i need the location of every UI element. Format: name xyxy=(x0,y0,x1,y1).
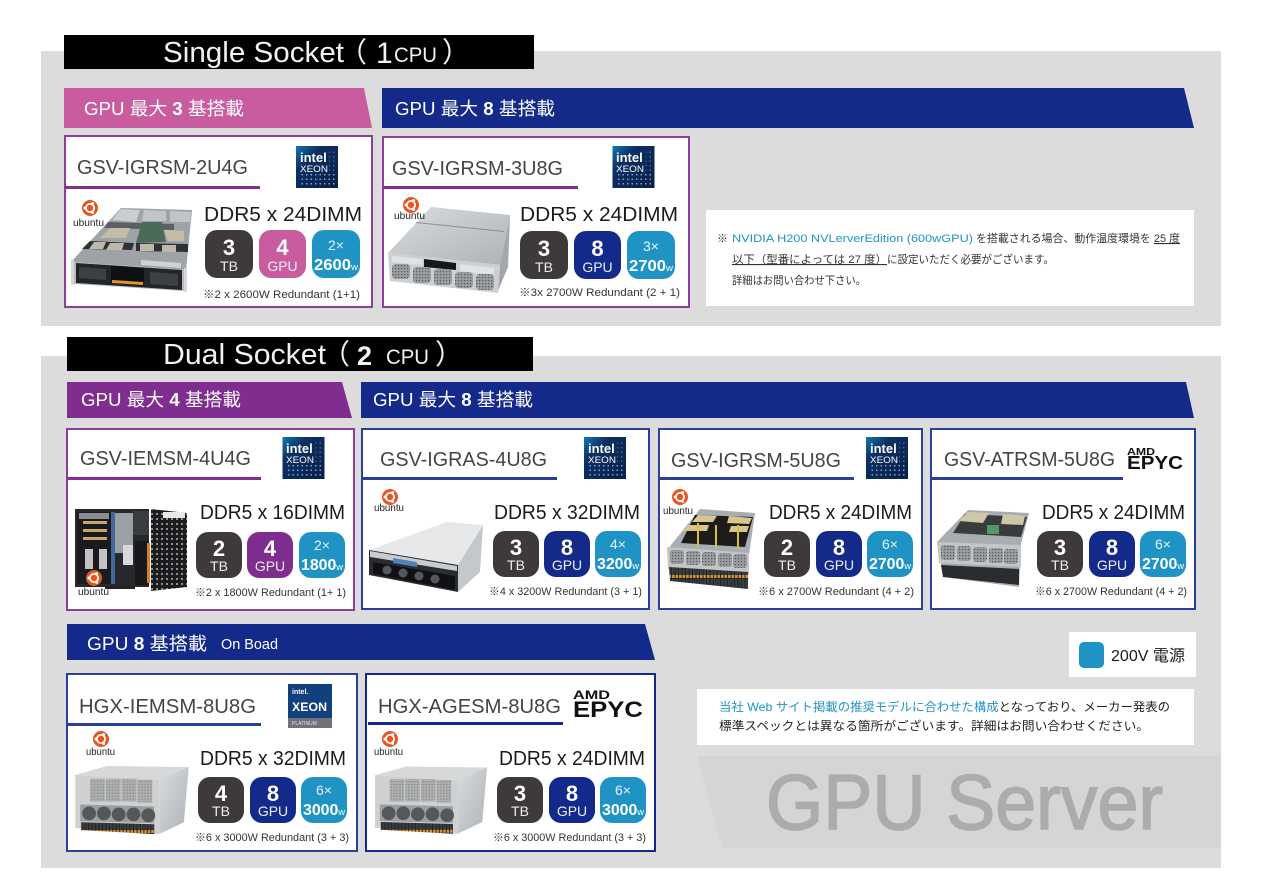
badge: gpu: GPU xyxy=(582,259,613,275)
memory spec: DDR5 x 24DIMM xyxy=(204,204,362,226)
memory spec: DDR5 x 32DIMM xyxy=(200,748,346,770)
badge: memory: 2 xyxy=(213,536,225,561)
badge: memory xyxy=(497,777,543,823)
logo: ubuntu xyxy=(86,731,115,758)
heading: single socket: CPU xyxy=(394,44,437,67)
badge: memory xyxy=(205,230,253,278)
badge: gpu: 8 xyxy=(561,535,573,560)
server photo xyxy=(75,509,187,591)
model name: HGX-AGESM-8U8G xyxy=(378,696,561,718)
logo: intel xeon: XEON xyxy=(588,455,616,466)
banner: gpu max 8 xyxy=(382,88,1194,128)
badge: power: 3× xyxy=(643,238,659,254)
callout: temperature note: に設定いただく必要がございます。 xyxy=(887,252,1054,266)
badge: memory xyxy=(493,531,539,577)
server photo xyxy=(388,207,510,293)
logo: intel xeon: intel xyxy=(286,441,313,456)
legend: 200V power: 200V 電源 xyxy=(1111,647,1185,665)
logo: amd epyc: EPYC xyxy=(1127,453,1183,473)
badge: power: 2600 w xyxy=(314,257,359,274)
callout: temperature note: NVIDIA H200 NVLerverEdition (600wGPU) xyxy=(732,233,973,245)
card: HGX-AGESM-8U8G xyxy=(366,674,655,851)
logo: intel xeon: intel xyxy=(300,150,327,165)
badge: gpu xyxy=(544,531,590,577)
badge: gpu xyxy=(574,231,621,279)
badge: power xyxy=(312,230,360,278)
badge: memory: TB xyxy=(1051,557,1069,573)
badge: power: 1800w xyxy=(301,557,344,574)
badge: power: 4× xyxy=(610,536,626,552)
banner: gpu max 8: GPU 最大 8 基搭載 xyxy=(395,99,555,119)
banner: gpu 8 on board xyxy=(67,624,655,660)
heading: dual socket: 2 xyxy=(357,341,372,371)
logo: intel xeon: XEON xyxy=(870,455,898,466)
logo: amd epyc xyxy=(573,688,643,722)
memory spec: DDR5 x 24DIMM xyxy=(1042,502,1185,524)
badge: gpu: GPU xyxy=(255,558,285,574)
logo: intel xeon platinum: intel. xyxy=(292,689,308,696)
callout: temperature note: ※ xyxy=(717,233,728,245)
model name: GSV-IGRSM-5U8G xyxy=(671,450,841,472)
badge: gpu xyxy=(247,532,293,578)
callout: temperature note xyxy=(706,210,1194,306)
badge: gpu: 8 xyxy=(591,236,604,261)
badge: gpu xyxy=(549,777,595,823)
callout: temperature note: を搭載される場合、動作温度環境を 25 度 xyxy=(976,231,1180,245)
badge: memory: TB xyxy=(212,803,230,819)
logo: intel xeon xyxy=(282,437,324,479)
heading: single socket: Single Socket xyxy=(163,37,344,69)
badge: power xyxy=(867,531,913,577)
badge: memory: TB xyxy=(535,259,553,275)
redundancy note: ※2 x 1800W Redundant (1+ 1) xyxy=(195,587,346,599)
badge: memory: 4 xyxy=(215,781,228,806)
heading: dual socket: CPU xyxy=(386,346,429,369)
logo: intel xeon: intel xyxy=(870,441,897,456)
badge: gpu: GPU xyxy=(267,258,298,274)
badge: power: 2× xyxy=(328,237,344,253)
model name: GSV-IGRAS-4U8G xyxy=(380,449,547,471)
logo: ubuntu xyxy=(394,197,425,222)
server photo xyxy=(937,510,1029,587)
badge: memory: 3 xyxy=(510,535,522,560)
memory spec: DDR5 x 16DIMM xyxy=(200,502,345,524)
badge: memory: 3 xyxy=(514,781,526,806)
badge: gpu: GPU xyxy=(552,557,582,573)
card: HGX-IEMSM-8U8G xyxy=(67,674,357,851)
badge: power: 2700w xyxy=(1142,556,1185,573)
callout: recommended configuration note: 当社 Web サイト掲載の推奨モデルに合わせた構成 となっており、メーカー発表の xyxy=(719,699,1170,714)
banner: gpu max 3: GPU 最大 3 基搭載 xyxy=(84,99,244,119)
badge: memory xyxy=(1037,531,1083,577)
heading: single socket: 1 xyxy=(376,37,393,70)
badge: gpu: GPU xyxy=(258,803,288,819)
badge: power: 2700 w xyxy=(629,258,674,275)
badge: power: 2700w xyxy=(869,556,912,573)
badge: power xyxy=(600,777,646,823)
panel: single socket xyxy=(41,51,1221,326)
badge: gpu: 8 xyxy=(267,781,279,806)
badge: power: 3000w xyxy=(602,802,645,819)
badge: memory: TB xyxy=(778,557,796,573)
badge: gpu xyxy=(259,230,306,278)
badge: power: 3000w xyxy=(303,802,346,819)
badge: gpu xyxy=(250,777,296,823)
badge: memory: 3 xyxy=(538,236,550,261)
memory spec: DDR5 x 24DIMM xyxy=(520,204,678,226)
model name: GSV-ATRSM-5U8G xyxy=(944,449,1115,471)
badge: gpu: 4 xyxy=(276,235,289,260)
logo: intel xeon: XEON xyxy=(286,455,314,466)
banner: gpu max 3 xyxy=(64,88,372,128)
badge: gpu: GPU xyxy=(1097,557,1127,573)
card: GSV-ATRSM-5U8G xyxy=(931,429,1195,609)
legend: 200V power xyxy=(1069,632,1196,677)
card: GSV-IGRAS-4U8G xyxy=(362,429,649,609)
logo: ubuntu: ubuntu xyxy=(78,586,109,598)
badge: memory: TB xyxy=(220,258,238,274)
heading: dual socket: Dual Socket xyxy=(163,339,326,371)
logo: intel xeon xyxy=(296,146,338,188)
badge: power: 3200w xyxy=(597,556,640,573)
badge: power xyxy=(595,531,641,577)
server photo xyxy=(375,766,487,834)
logo: ubuntu xyxy=(663,489,693,517)
badge: memory xyxy=(764,531,810,577)
memory spec: DDR5 x 24DIMM xyxy=(499,748,645,770)
badge: memory xyxy=(196,532,242,578)
model name: GSV-IGRSM-2U4G xyxy=(77,157,248,179)
callout: recommended configuration note: 標準スペックとは異なる箇所がございます。詳細はお問い合わせください。 xyxy=(719,718,1149,733)
model name: HGX-IEMSM-8U8G xyxy=(79,696,256,718)
card: GSV-IGRSM-2U4G xyxy=(65,136,372,307)
badge: power xyxy=(627,231,675,279)
badge: gpu: 8 xyxy=(833,535,845,560)
badge: gpu: 4 xyxy=(264,536,277,561)
redundancy note: ※4 x 3200W Redundant (3 + 1) xyxy=(489,586,642,598)
logo: intel xeon: intel xyxy=(588,441,615,456)
logo: intel xeon platinum: PLATINUM xyxy=(292,721,317,727)
model name: GSV-IGRSM-3U8G xyxy=(392,158,563,180)
callout: temperature note: 以下（型番によっては 27 度） xyxy=(732,252,887,266)
panel: dual socket xyxy=(41,356,1221,868)
banner: gpu max 8 dual: GPU 最大 8 基搭載 xyxy=(373,390,533,410)
logo: ubuntu: ubuntu xyxy=(663,505,693,517)
logo: intel xeon platinum: XEON xyxy=(292,700,327,714)
logo: ubuntu: ubuntu xyxy=(394,210,425,222)
logo: intel xeon: intel xyxy=(616,150,643,165)
logo: amd epyc: AMD xyxy=(573,688,610,702)
badge: gpu xyxy=(816,531,862,577)
badge: gpu: GPU xyxy=(824,557,854,573)
card: GSV-IGRSM-3U8G xyxy=(383,137,689,307)
memory spec: DDR5 x 32DIMM xyxy=(494,502,640,524)
logo: ubuntu: ubuntu xyxy=(374,746,403,758)
badge: memory: 2 xyxy=(781,535,793,560)
banner: gpu 8 on board: GPU 8 基搭載 xyxy=(87,634,207,654)
badge: memory: 3 xyxy=(1054,535,1066,560)
logo: amd epyc: EPYC xyxy=(573,697,643,722)
callout: temperature note: 詳細はお問い合わせ下さい。 xyxy=(732,273,866,287)
logo: ubuntu xyxy=(374,731,403,758)
logo: ubuntu xyxy=(374,489,404,514)
badge: memory xyxy=(520,231,568,279)
callout: recommended configuration note xyxy=(697,689,1194,745)
badge: memory xyxy=(198,777,244,823)
logo: intel xeon xyxy=(612,146,654,188)
badge: memory: 3 xyxy=(223,235,235,260)
memory spec: DDR5 x 24DIMM xyxy=(769,502,912,524)
logo: intel xeon: XEON xyxy=(616,164,644,175)
badge: power: 6× xyxy=(882,536,898,552)
logo: ubuntu xyxy=(73,200,104,229)
badge: gpu: 8 xyxy=(566,781,578,806)
redundancy note: ※6 x 2700W Redundant (4 + 2) xyxy=(758,586,914,598)
redundancy note: ※6 x 2700W Redundant (4 + 2) xyxy=(1035,586,1187,598)
card: GSV-IGRSM-5U8G xyxy=(659,429,922,609)
logo: ubuntu: ubuntu xyxy=(374,502,404,514)
banner: gpu max 4 xyxy=(67,382,352,418)
heading: single socket: （ xyxy=(339,37,367,68)
logo: ubuntu xyxy=(78,570,109,598)
badge: memory: TB xyxy=(507,557,525,573)
banner: gpu 8 on board: On Boad xyxy=(221,636,278,653)
badge: gpu: 8 xyxy=(1106,535,1118,560)
logo: intel xeon: XEON xyxy=(300,164,328,175)
redundancy note: ※2 x 2600W Redundant (1+1) xyxy=(203,289,360,301)
banner: gpu max 4: GPU 最大 4 基搭載 xyxy=(81,390,241,410)
logo: amd epyc xyxy=(1127,447,1183,473)
server photo xyxy=(75,766,189,834)
logo: ubuntu: ubuntu xyxy=(73,217,104,229)
logo: intel xeon xyxy=(866,437,908,479)
badge: power: 6× xyxy=(615,782,631,798)
logo: ubuntu: ubuntu xyxy=(86,746,115,758)
badge: memory: TB xyxy=(210,558,228,574)
model name: GSV-IEMSM-4U4G xyxy=(80,448,251,470)
heading: dual socket: ） xyxy=(435,339,463,370)
badge: memory: TB xyxy=(511,803,529,819)
redundancy note: ※6 x 3000W Redundant (3 + 3) xyxy=(195,832,349,844)
server photo xyxy=(369,522,483,592)
badge: power: 2× xyxy=(314,537,330,553)
badge: gpu xyxy=(1089,531,1135,577)
logo: amd epyc: AMD xyxy=(1127,447,1155,458)
heading: dual socket xyxy=(67,337,533,371)
badge: gpu: GPU xyxy=(557,803,587,819)
redundancy note: ※3x 2700W Redundant (2 + 1) xyxy=(519,287,680,299)
badge: power: 6× xyxy=(1155,536,1171,552)
card: GSV-IEMSM-4U4G xyxy=(67,429,354,610)
heading: dual socket: （ xyxy=(322,339,350,370)
server photo xyxy=(71,208,192,292)
badge: power xyxy=(1140,531,1186,577)
heading: single socket: ） xyxy=(442,37,470,68)
logo: intel xeon xyxy=(584,437,626,479)
heading: single socket xyxy=(64,35,534,70)
badge: power xyxy=(301,777,347,823)
redundancy note: ※6 x 3000W Redundant (3 + 3) xyxy=(493,832,646,844)
logo: intel xeon platinum xyxy=(288,684,332,728)
badge: power: 6× xyxy=(316,782,332,798)
badge: power xyxy=(299,532,345,578)
banner: gpu max 8 dual xyxy=(361,382,1194,418)
watermark: GPU Server: GPU Server xyxy=(766,758,1163,846)
server photo xyxy=(667,509,755,589)
